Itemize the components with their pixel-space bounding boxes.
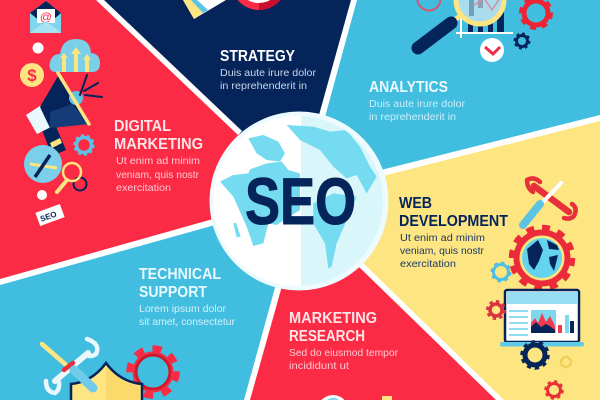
panel: analytics [299, 0, 600, 201]
text: technical support body [139, 303, 235, 328]
globe [210, 110, 391, 290]
heading: digital marketing: DIGITAL [114, 118, 171, 135]
icon: cloud with arrows [50, 39, 100, 72]
heading: digital marketing [114, 118, 203, 153]
text: web development body: veniam, quis nostr [400, 245, 484, 257]
heading: technical support: SUPPORT [139, 284, 207, 301]
text: marketing research body: Sed do eiusmod tempor [289, 347, 398, 359]
text: digital marketing body: veniam, quis nostr [116, 169, 199, 181]
icon: cropped bottom circle [321, 395, 345, 400]
icon: red gear [522, 0, 550, 28]
icon: document corner [183, 0, 226, 19]
title: SEO: SEO [245, 164, 356, 238]
text: strategy body: Duis aute irure dolor [220, 67, 317, 79]
text: digital marketing body: Ut enim ad minim [116, 155, 200, 167]
icon: shield [71, 363, 142, 400]
panel: digital marketing [0, 0, 299, 282]
icon: red gear [130, 349, 176, 395]
text: technical support body: Lorem ipsum dolor [139, 303, 227, 315]
icon: small cyan gear [74, 136, 94, 154]
icon: envelope: @ [40, 10, 52, 24]
text: analytics body: Duis aute irure dolor [369, 98, 466, 110]
text: marketing research body [289, 347, 398, 372]
heading: web development: DEVELOPMENT [399, 213, 508, 230]
text: technical support body: sit amet, consectetur [139, 316, 235, 328]
icon: white dot [32, 42, 44, 54]
heading: web development [399, 195, 508, 230]
icon: wrench and screwdriver [523, 178, 576, 225]
icon: small cyan gear [492, 262, 510, 282]
icon: dollar coin: $ [27, 66, 37, 85]
icon: navy gear [514, 34, 530, 48]
icon: magnifier [57, 163, 86, 192]
icon: ring [418, 0, 440, 10]
icon: magnifying glass [418, 0, 504, 48]
icon: bottom red gear [546, 382, 562, 398]
panel: marketing research [247, 201, 500, 400]
heading: marketing research [289, 310, 377, 345]
text: digital marketing body: exercitation [116, 182, 171, 194]
text: strategy body [220, 67, 317, 92]
text: web development body [400, 232, 485, 270]
text: marketing research body: incididunt ut [289, 360, 349, 372]
text: digital marketing body [116, 155, 200, 194]
icon: SEO tag [35, 204, 65, 226]
panel: technical support [0, 201, 299, 400]
heading: marketing research: MARKETING [289, 310, 377, 327]
icon: cropped yellow item [382, 396, 392, 400]
heading: marketing research: RESEARCH [289, 328, 365, 345]
text: analytics body: in reprehenderit in [369, 111, 456, 123]
icon: navy gear [522, 342, 548, 368]
heading: web development: WEB [399, 195, 432, 212]
text: analytics body [369, 98, 466, 123]
icon: yellow ring [561, 357, 571, 367]
icon: pencil circle [24, 145, 62, 183]
heading: analytics: ANALYTICS [369, 79, 448, 96]
icon: SEO tag: SEO [39, 210, 58, 224]
icon: envelope [30, 1, 61, 33]
icon: megaphone [26, 73, 102, 156]
heading: technical support: TECHNICAL [139, 266, 221, 283]
icon: laptop [500, 290, 584, 346]
text: web development body: exercitation [400, 258, 456, 270]
icon: chevron badge [480, 38, 504, 62]
heading: strategy: STRATEGY [220, 48, 296, 65]
icon: dollar coin [20, 63, 44, 87]
icon: wrench [46, 339, 97, 393]
globe continents [220, 125, 377, 268]
panel: strategy [100, 0, 353, 201]
heading: digital marketing: MARKETING [114, 136, 203, 153]
icon: small red gear [488, 302, 504, 318]
icon: globe gear [512, 228, 572, 288]
text: web development body: Ut enim ad minim [400, 232, 485, 244]
icon: screwdriver [42, 344, 93, 388]
heading: technical support [139, 266, 221, 301]
text: strategy body: in reprehenderit in [220, 80, 307, 92]
icon: white dot small [37, 190, 47, 200]
panel: web development [299, 118, 600, 400]
icon: bar chart [456, 8, 513, 38]
icon: target edge [231, 0, 287, 10]
